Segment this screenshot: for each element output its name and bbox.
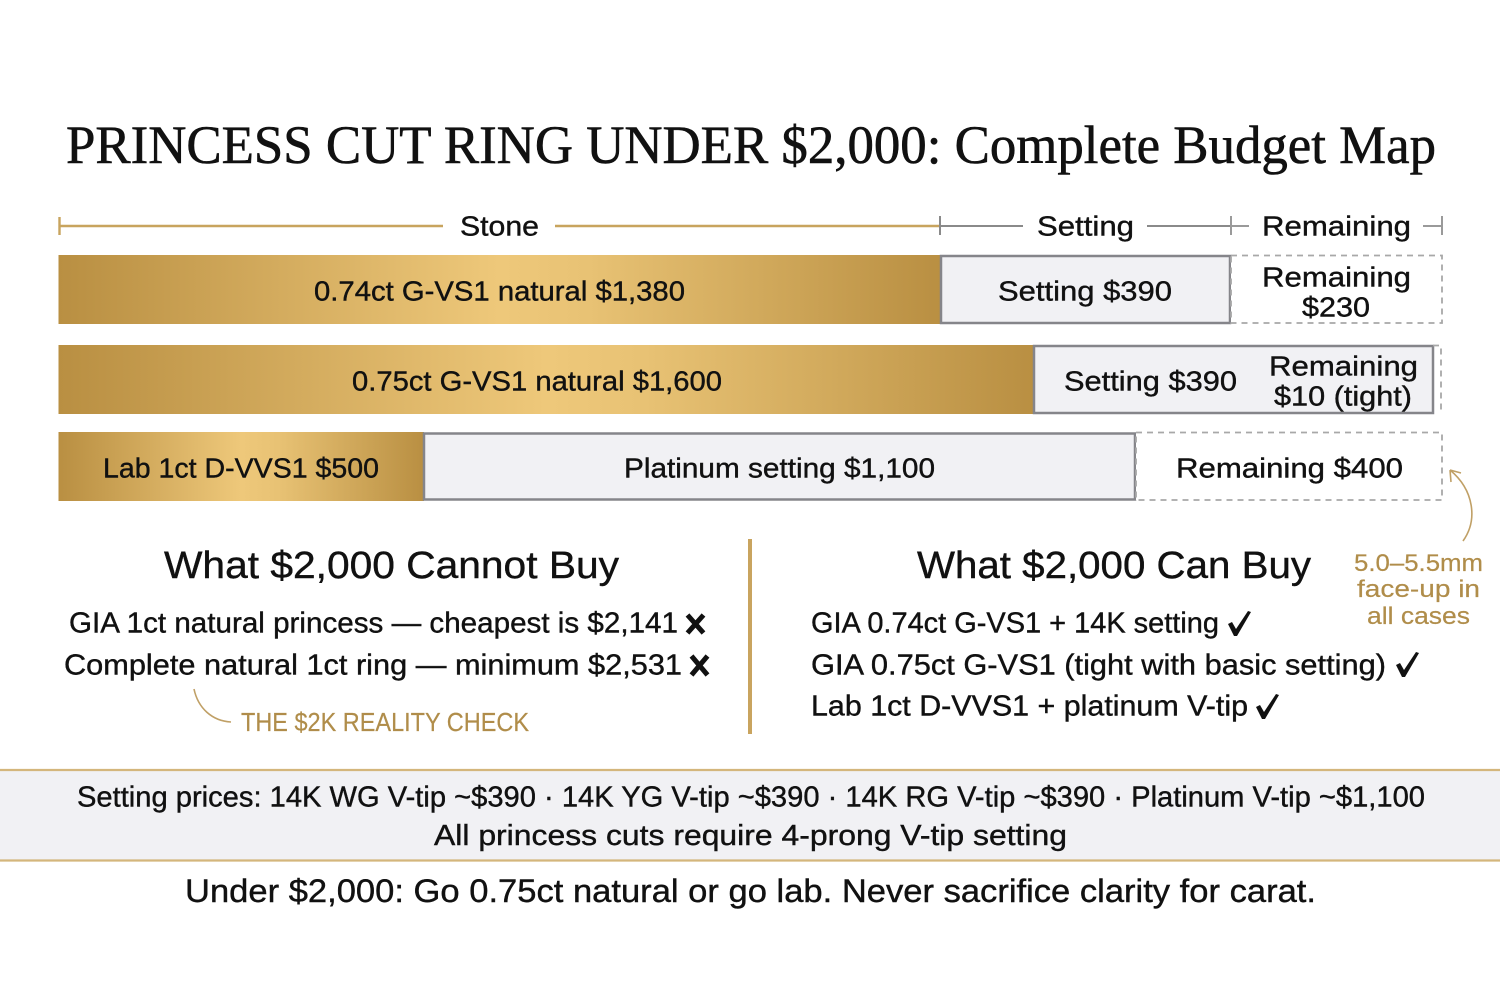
- budget bar 2: [58, 345, 1441, 414]
- setting prices band: [0, 770, 1500, 861]
- setting segment: Setting $390: [1064, 366, 1237, 396]
- setting prices band: All princess cuts require 4-prong V-tip setting: [434, 820, 1067, 852]
- setting prices band: Setting prices: 14K WG V-tip ~$390 · 14K YG V-tip ~$390 · 14K RG V-tip ~$390 · Platinum V-tip ~$1,100: [77, 782, 1425, 814]
- annotation: stone face-up size: [1354, 550, 1483, 630]
- remaining segment: $10 (tight): [1274, 380, 1412, 412]
- annotation: stone face-up size: face-up in: [1357, 576, 1480, 603]
- takeaway line: Under $2,000: Go 0.75ct natural or go lab. Never sacrifice clarity for carat.: [185, 873, 1316, 909]
- setting segment: [424, 434, 1135, 500]
- panel: what $2,000 can buy: [811, 545, 1419, 722]
- setting segment: Setting $390: [998, 276, 1172, 306]
- stone segment: [58, 255, 941, 324]
- list item: complete ring: Complete natural 1ct ring — minimum $2,531: [64, 650, 682, 682]
- arrow: annotation to remaining: [1450, 470, 1472, 541]
- remaining segment: [1136, 432, 1442, 500]
- bracket header: stone, setting, remaining: [59, 210, 1442, 242]
- annotation: reality check: THE $2K REALITY CHECK: [241, 707, 530, 737]
- remaining segment: Remaining $400: [1176, 452, 1403, 484]
- remaining segment: [1231, 256, 1442, 323]
- panel: what $2,000 cannot buy: [64, 545, 708, 737]
- setting segment: [1034, 346, 1433, 413]
- stone segment: [58, 432, 424, 501]
- bracket: setting: [940, 210, 1231, 242]
- heading: What $2,000 Cannot Buy: [164, 545, 619, 587]
- remaining segment: Remaining: [1262, 262, 1411, 292]
- budget bar 1: [58, 255, 1442, 324]
- list item: 0.74ct: GIA 0.74ct G-VS1 + 14K setting: [811, 608, 1219, 640]
- remaining segment: Remaining: [1269, 350, 1418, 382]
- heading: What $2,000 Can Buy: [917, 545, 1311, 587]
- stone segment: Lab 1ct D-VVS1 $500: [103, 452, 379, 484]
- title: PRINCESS CUT RING UNDER $2,000: Complete Budget Map: [66, 115, 1436, 175]
- budget bar 3: [58, 432, 1442, 501]
- stone segment: 0.74ct G-VS1 natural $1,380: [314, 276, 685, 306]
- divider: [748, 539, 752, 734]
- setting segment: Platinum setting $1,100: [624, 452, 935, 484]
- bracket: setting: Setting: [1037, 210, 1134, 242]
- arrow: reality check: [194, 689, 231, 722]
- bracket: remaining: [1231, 210, 1442, 242]
- stone segment: 0.75ct G-VS1 natural $1,600: [352, 366, 722, 396]
- stone segment: [58, 345, 1034, 414]
- bracket: stone: [59, 210, 940, 242]
- list item: 0.75ct: GIA 0.75ct G-VS1 (tight with basic setting): [811, 650, 1386, 682]
- remaining segment: [1269, 346, 1441, 413]
- bracket: remaining: Remaining: [1262, 210, 1411, 242]
- remaining segment: $230: [1302, 292, 1370, 322]
- bracket: stone: Stone: [460, 210, 539, 242]
- setting segment: [941, 256, 1230, 323]
- list item: lab 1ct: Lab 1ct D-VVS1 + platinum V-tip: [811, 690, 1248, 722]
- list item: GIA 1ct: GIA 1ct natural princess — cheapest is $2,141: [69, 608, 678, 640]
- annotation: stone face-up size: 5.0–5.5mm: [1354, 550, 1483, 577]
- annotation: stone face-up size: all cases: [1367, 603, 1470, 630]
